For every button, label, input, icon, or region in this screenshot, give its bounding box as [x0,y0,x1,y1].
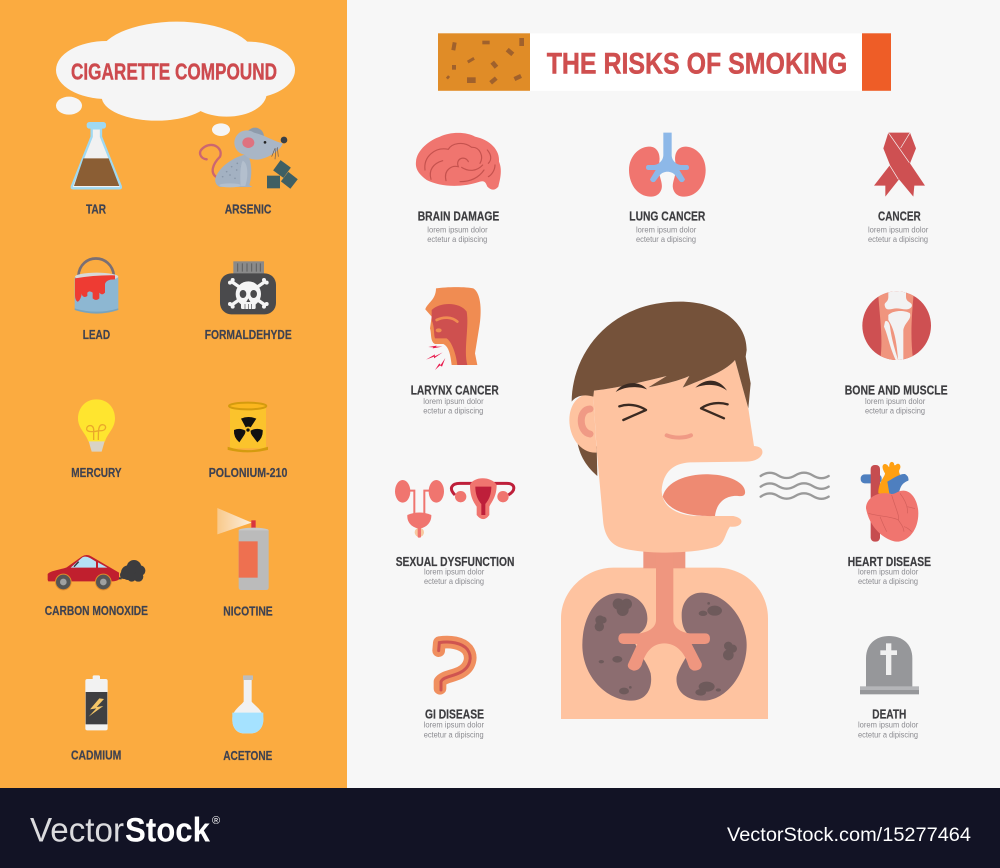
icon: tombstone [860,636,919,694]
damaged right lung [676,593,747,701]
risk: cancer: ectetur a dipiscing [868,235,928,244]
icon: lungs [629,133,706,197]
risk: death: ectetur a dipiscing [858,730,918,739]
risk: gi disease: ectetur a dipiscing [424,730,484,739]
risk: cancer: CANCER [878,209,921,224]
item: arsenic: ARSENIC [225,202,272,216]
nostril crease [667,435,691,438]
item: lead: LEAD [83,327,110,342]
icon: knee joint [862,290,931,362]
ear [569,394,597,453]
risk: heart disease [848,462,931,586]
logo: Stock [125,812,210,850]
risk: lung cancer: lorem ipsum dolor [636,226,697,235]
icon: throat cross-section [425,287,481,370]
risk: sexual dysfunction [395,478,514,586]
central figure: man exhaling with damaged lungs [561,302,829,719]
icon: light bulb [78,399,115,452]
eyes and brows [616,381,728,420]
risk: larynx cancer: LARYNX CANCER [411,383,499,398]
item: formaldehyde: FORMALDEHYDE [205,327,292,342]
title: THE RISKS OF SMOKING [547,48,847,81]
risk: cancer: lorem ipsum dolor [868,226,929,235]
risk: lung cancer: LUNG CANCER [629,209,706,224]
item: carbon monoxide: CARBON MONOXIDE [45,603,148,618]
risk: heart disease: lorem ipsum dolor [858,568,919,576]
tar spots [595,598,737,696]
risk: death: lorem ipsum dolor [858,720,919,730]
hair [572,302,751,408]
tongue [663,474,745,516]
item: lead [75,258,118,342]
footer [0,788,1000,868]
item: formaldehyde [205,261,292,342]
item: polonium-210 [209,403,287,480]
risk: brain damage [416,133,501,244]
risk: heart disease: HEART DISEASE [848,554,931,569]
icon: intestine [439,642,470,690]
risk: bone and muscle [845,290,948,415]
risk: larynx cancer: ectetur a dipiscing [423,406,483,415]
item: carbon monoxide [45,555,148,618]
risk: lung cancer: ectetur a dipiscing [636,235,696,244]
risk: death [858,636,919,739]
risk: gi disease: lorem ipsum dolor [424,720,484,730]
title banner: cigarette [438,33,891,91]
smoke waves [761,473,829,499]
icon: radioactive barrel [228,403,267,452]
item: mercury: MERCURY [71,465,122,480]
risk: bone and muscle: BONE AND MUSCLE [845,383,948,398]
icon: mouse with arsenic cubes [200,128,298,189]
logo: ® [212,815,220,827]
image id: VectorStock.com/15277464 [727,824,971,846]
risk: sexual dysfunction: lorem ipsum dolor [424,568,485,576]
icon: flask of tar [72,122,121,188]
cigarette ember [862,33,891,91]
risk: brain damage: lorem ipsum dolor [427,226,488,235]
back hair [577,437,597,476]
damaged left lung [582,593,651,701]
icon: paint bucket [75,258,118,314]
item: arsenic [200,128,298,216]
item: polonium-210: POLONIUM-210 [209,465,287,480]
risk: bone and muscle: lorem ipsum dolor [865,397,926,406]
panel: cigarette compound [0,0,347,788]
face [593,360,762,553]
risk: lung cancer [629,133,706,244]
icon: brain [416,133,501,190]
risk: cancer [868,133,929,244]
heading bubble: cigarette compound [56,22,295,136]
risk: bone and muscle: ectetur a dipiscing [865,406,925,415]
risk: brain damage: ectetur a dipiscing [427,235,487,244]
icon: battery [85,675,108,730]
icon: reproductive organs [395,478,514,538]
icon: spray can [217,508,269,590]
item: tar: TAR [86,202,106,216]
logo: Vector [30,812,124,850]
item: acetone [223,675,273,763]
icon: heart [861,462,918,542]
risk: death: DEATH [872,706,906,721]
risk: gi disease: GI DISEASE [425,706,484,721]
risk: heart disease: ectetur a dipiscing [858,577,918,586]
logo [30,812,220,850]
risk: larynx cancer [411,287,499,415]
risk: brain damage: BRAIN DAMAGE [418,209,500,224]
heading bubble: cigarette compound: CIGARETTE COMPOUND [71,58,277,84]
cigarette filter [438,33,530,91]
icon: round flask [232,675,263,733]
trachea and bronchi [618,550,710,671]
item: nicotine [217,508,273,619]
item: cadmium: CADMIUM [71,748,121,763]
risk: sexual dysfunction: SEXUAL DYSFUNCTION [396,554,514,569]
item: mercury [71,399,122,480]
item: cadmium [71,675,121,763]
icon: poison bottle with skull [220,261,276,314]
torso [561,568,768,719]
risk: gi disease [424,642,484,739]
risk: larynx cancer: lorem ipsum dolor [423,397,484,406]
risk: sexual dysfunction: ectetur a dipiscing [424,577,484,586]
icon: car with exhaust [48,555,145,590]
icon: ribbon [874,133,925,197]
item: tar [72,122,121,216]
item: acetone: ACETONE [223,748,273,763]
neck [643,550,685,568]
item: nicotine: NICOTINE [223,604,273,619]
